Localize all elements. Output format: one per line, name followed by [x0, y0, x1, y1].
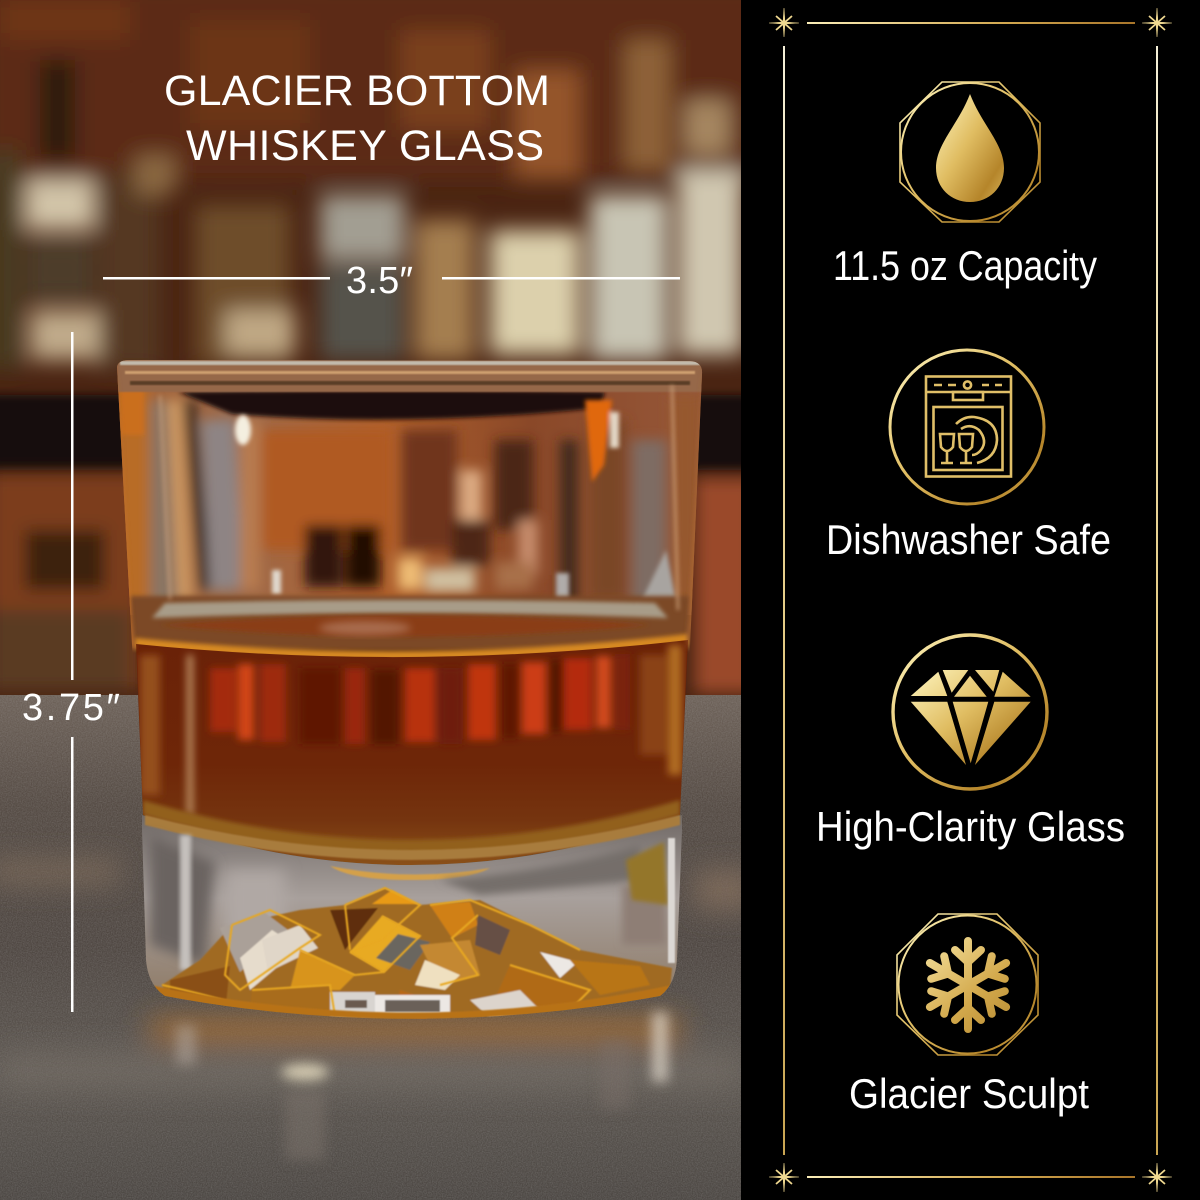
lower whiskey glow — [143, 800, 680, 855]
panel: bar photograph background — [0, 0, 770, 1200]
icon: water drop — [900, 82, 1040, 222]
whiskey glass — [110, 355, 710, 1020]
icon: dishwasher — [890, 350, 1044, 504]
icon: diamond — [893, 635, 1047, 789]
rim bands — [117, 360, 703, 392]
feature: dishwasher safe — [826, 350, 1111, 563]
label: 11.5 oz Capacity — [833, 242, 1097, 289]
width dimension 3.5 inches: 3.5″ — [346, 260, 413, 302]
feature: high-clarity glass — [816, 635, 1125, 850]
red reflected stripes — [140, 645, 682, 815]
bottom edge rim — [150, 985, 672, 1019]
dark reflected shelf — [178, 390, 605, 420]
orange flare and highlights — [120, 385, 676, 600]
height dimension 3.75 inches: 3.75″ — [22, 687, 120, 729]
dark shelf band — [0, 395, 750, 470]
title: WHISKEY GLASS — [186, 122, 544, 170]
whiskey body — [136, 640, 688, 865]
decorative frame — [769, 8, 1172, 1192]
glacier sculpted bottom — [162, 888, 672, 1020]
counter reflections — [176, 1012, 668, 1160]
title: GLACIER BOTTOM — [164, 67, 550, 115]
lower shelf — [0, 474, 755, 693]
feature: 11.5 oz capacity — [833, 82, 1097, 289]
label: Dishwasher Safe — [826, 516, 1111, 563]
thick glass base — [142, 815, 682, 1000]
glass upper reflections — [110, 355, 710, 615]
sculpt gold ridges — [162, 888, 590, 1016]
blurred bar bottles — [0, 0, 770, 370]
glass left and right walls — [117, 368, 702, 650]
title — [164, 67, 550, 170]
whiskey surface — [130, 596, 690, 660]
feature: glacier sculpt — [849, 914, 1089, 1117]
icon: snowflake — [897, 914, 1038, 1055]
label: High-Clarity Glass — [816, 803, 1125, 850]
label: Glacier Sculpt — [849, 1070, 1089, 1117]
panel: features — [741, 0, 1200, 1200]
counter top — [0, 695, 755, 1200]
